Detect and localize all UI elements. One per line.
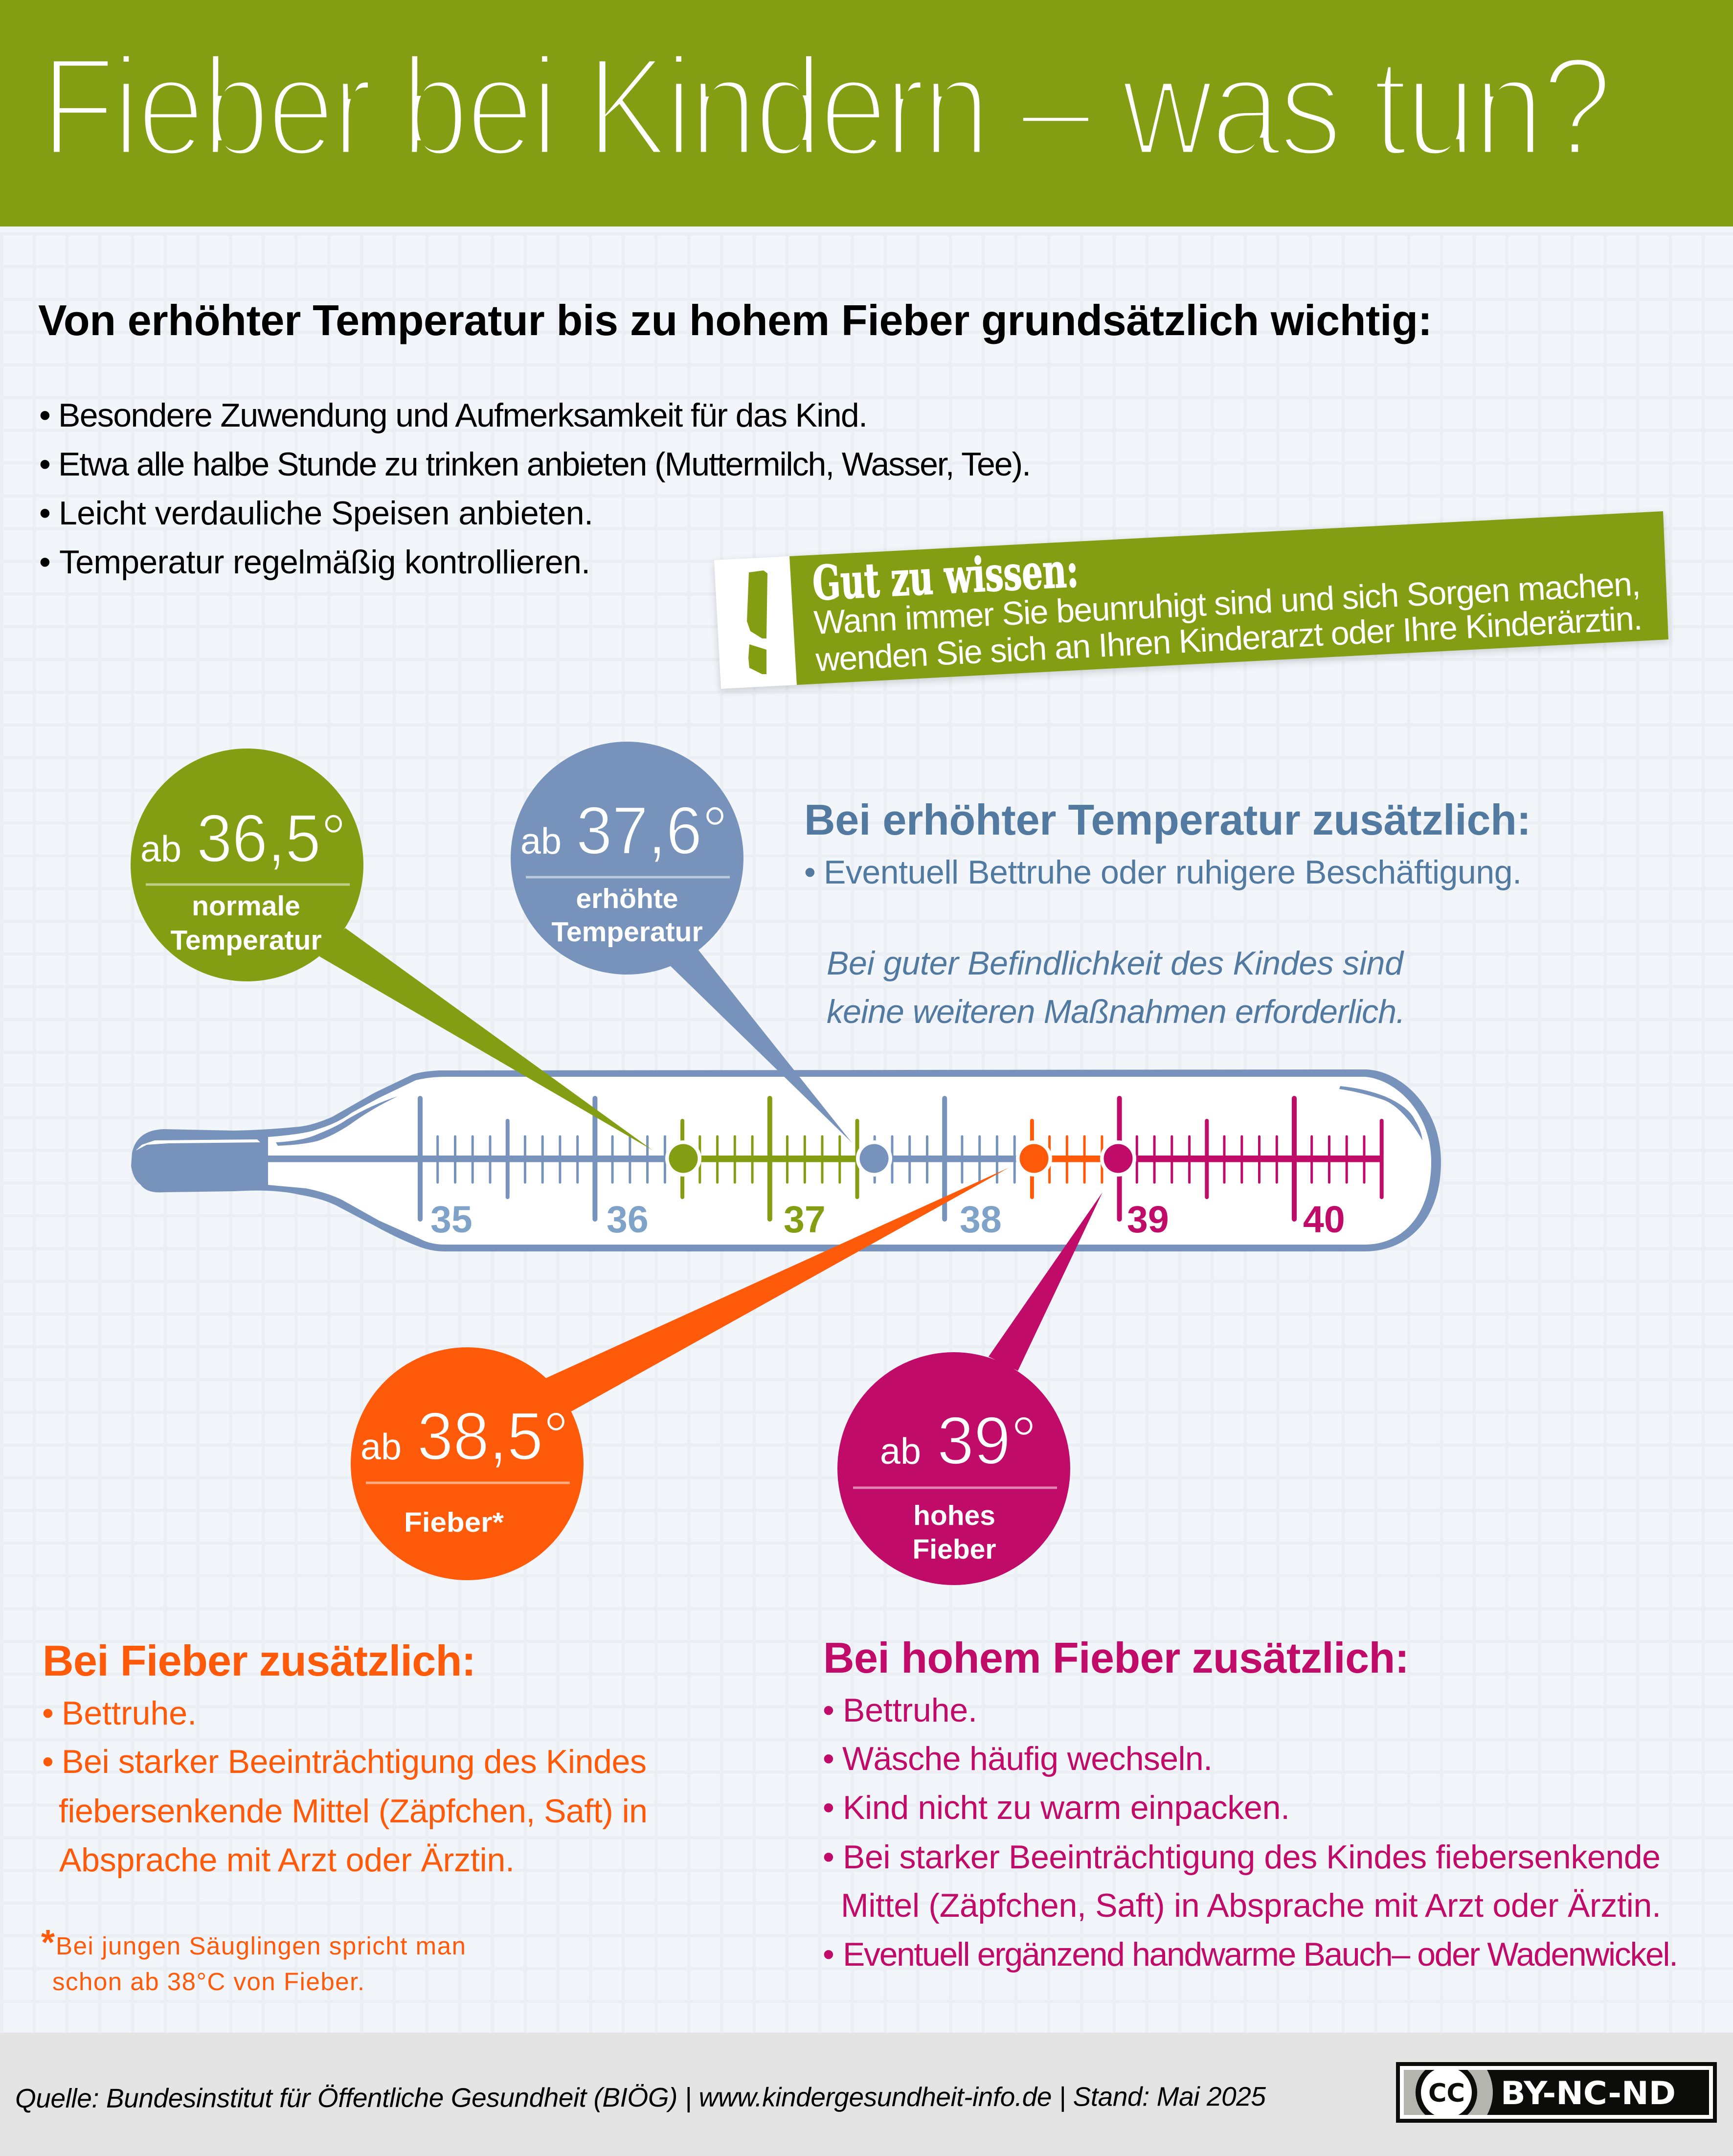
callout: high fever: Fieber xyxy=(912,1534,996,1565)
scale numbers xyxy=(430,1199,1345,1241)
fever bullet list: • xyxy=(42,1695,54,1732)
bullet: bed rest: Eventuell Bettruhe oder ruhigere Beschäftigung. xyxy=(824,854,1522,891)
callout text: wenden Sie sich an Ihren Kinderarzt oder Ihre Kinderärztin. xyxy=(814,599,1643,679)
thermometer body xyxy=(131,1069,1441,1251)
high fever bullet list: Wäsche häufig wechseln. xyxy=(842,1740,1213,1777)
footer band xyxy=(0,2033,1733,2156)
callout: normal temperature xyxy=(131,749,653,1150)
callout: elevated temperature: ab xyxy=(520,820,562,862)
high fever bullet list: Bettruhe. xyxy=(843,1692,977,1729)
italic note: keine weiteren Maßnahmen erforderlich. xyxy=(827,993,1405,1030)
heading: fever: Bei Fieber zusätzlich: xyxy=(43,1636,476,1685)
callout: fever xyxy=(351,1168,1009,1580)
footnote: Bei jungen Säuglingen spricht man xyxy=(56,1932,466,1960)
licence badge: CC xyxy=(1428,2079,1465,2108)
general advice bullet list: • xyxy=(39,397,51,434)
scale numbers: 37 xyxy=(784,1199,826,1241)
high fever bullet list: • xyxy=(823,1740,834,1777)
fever bullet list xyxy=(42,1695,648,1879)
scale numbers: 35 xyxy=(430,1199,473,1241)
licence badge xyxy=(1396,2062,1717,2123)
general advice bullet list: Temperatur regelmäßig kontrollieren. xyxy=(59,544,590,581)
callout: high fever: 39° xyxy=(937,1403,1037,1478)
high fever bullet list: Bei starker Beeinträchtigung des Kindes fiebersenkende xyxy=(843,1838,1661,1876)
high fever bullet list: Kind nicht zu warm einpacken. xyxy=(843,1789,1290,1826)
title: Fieber bei Kindern xyxy=(41,28,988,185)
callout: elevated temperature: Temperatur xyxy=(551,916,703,948)
scale ticks xyxy=(420,1098,1382,1219)
callout: good to know banner xyxy=(714,511,1668,689)
fever bullet list: Absprache mit Arzt oder Ärztin. xyxy=(59,1841,515,1879)
footnote xyxy=(41,1923,466,1996)
thermometer xyxy=(131,1069,1441,1251)
panel: elevated temperature advice xyxy=(804,795,1531,1030)
general advice bullet list xyxy=(39,397,1031,581)
callout: normal temperature: Temperatur xyxy=(170,925,322,956)
high fever bullet list xyxy=(823,1692,1678,1973)
high fever bullet list: • xyxy=(823,1936,834,1973)
callout heading: Gut zu wissen: xyxy=(811,543,1080,611)
footnote: schon ab 38°C von Fieber. xyxy=(52,1968,364,1996)
glass highlights xyxy=(276,1086,1422,1146)
general advice bullet list: Besondere Zuwendung und Aufmerksamkeit für das Kind. xyxy=(58,397,868,434)
callout text xyxy=(813,565,1643,679)
high fever bullet list: Mittel (Zäpfchen, Saft) in Absprache mit Arzt oder Ärztin. xyxy=(841,1887,1661,1924)
high fever bullet list: • xyxy=(823,1838,834,1876)
callout: high fever: hohes xyxy=(913,1500,995,1531)
heading: elevated temperature: Bei erhöhter Temperatur zusätzlich: xyxy=(804,795,1531,844)
source line: Quelle: Bundesinstitut für Öffentliche Gesundheit (BIÖG) | www.kindergesundheit-info.de | Stand: Mai 2025 xyxy=(15,2081,1266,2114)
mercury axis xyxy=(267,1156,1382,1162)
heading: general advice: Von erhöhter Temperatur bis zu hohem Fieber grundsätzlich wichtig: xyxy=(38,296,1432,344)
italic note: Bei guter Befindlichkeit des Kindes sind xyxy=(827,945,1404,982)
scale numbers: 39 xyxy=(1127,1199,1169,1241)
callout: normal temperature: normale xyxy=(192,890,300,922)
bulb highlight xyxy=(135,1139,260,1151)
callout: normal temperature: 36,5° xyxy=(197,801,346,876)
callout: normal temperature: ab xyxy=(140,828,181,869)
general advice bullet list: Leicht verdauliche Speisen anbieten. xyxy=(59,495,593,532)
general advice bullet list: Etwa alle halbe Stunde zu trinken anbieten (Muttermilch, Wasser, Tee). xyxy=(58,446,1031,483)
high fever bullet list: • xyxy=(823,1789,834,1826)
callout: fever: ab xyxy=(360,1426,402,1467)
fever bullet list: fiebersenkende Mittel (Zäpfchen, Saft) in xyxy=(59,1793,648,1830)
footnote: * xyxy=(41,1923,55,1962)
icon: exclamation mark xyxy=(747,570,767,674)
scale numbers: 36 xyxy=(607,1199,649,1241)
callout: elevated temperature: erhöhte xyxy=(576,883,678,914)
fever bullet list: Bettruhe. xyxy=(62,1695,197,1732)
callout text: Wann immer Sie beunruhigt sind und sich Sorgen machen, xyxy=(813,565,1642,641)
general advice bullet list: • xyxy=(39,446,51,483)
general advice bullet list: • xyxy=(39,495,51,532)
italic note xyxy=(827,945,1405,1030)
high fever bullet list: • xyxy=(823,1692,834,1729)
scale numbers: 38 xyxy=(960,1199,1002,1241)
fever bullet list: • xyxy=(42,1743,54,1780)
panel: high fever advice xyxy=(823,1634,1678,1973)
callout: fever: 38,5° xyxy=(417,1399,569,1474)
fever bullet list: Bei starker Beeinträchtigung des Kindes xyxy=(62,1743,647,1780)
scale numbers: 40 xyxy=(1303,1199,1345,1241)
callout: high fever xyxy=(837,1192,1103,1585)
temperature markers xyxy=(665,1140,1136,1177)
callout: elevated temperature xyxy=(511,742,852,1142)
panel: fever advice xyxy=(41,1636,648,1996)
header band with title xyxy=(0,0,1733,227)
general advice bullet list: • xyxy=(39,544,51,581)
callout: high fever: ab xyxy=(880,1430,921,1472)
bullet: bed rest: • xyxy=(804,854,816,891)
callout: fever: Fieber* xyxy=(404,1507,504,1538)
heading: high fever: Bei hohem Fieber zusätzlich: xyxy=(823,1634,1409,1682)
title: – was tun? xyxy=(1020,28,1610,185)
licence badge: BY-NC-ND xyxy=(1501,2075,1676,2112)
callout: elevated temperature: 37,6° xyxy=(576,793,728,868)
high fever bullet list: Eventuell ergänzend handwarme Bauch– oder Wadenwickel. xyxy=(843,1936,1678,1973)
